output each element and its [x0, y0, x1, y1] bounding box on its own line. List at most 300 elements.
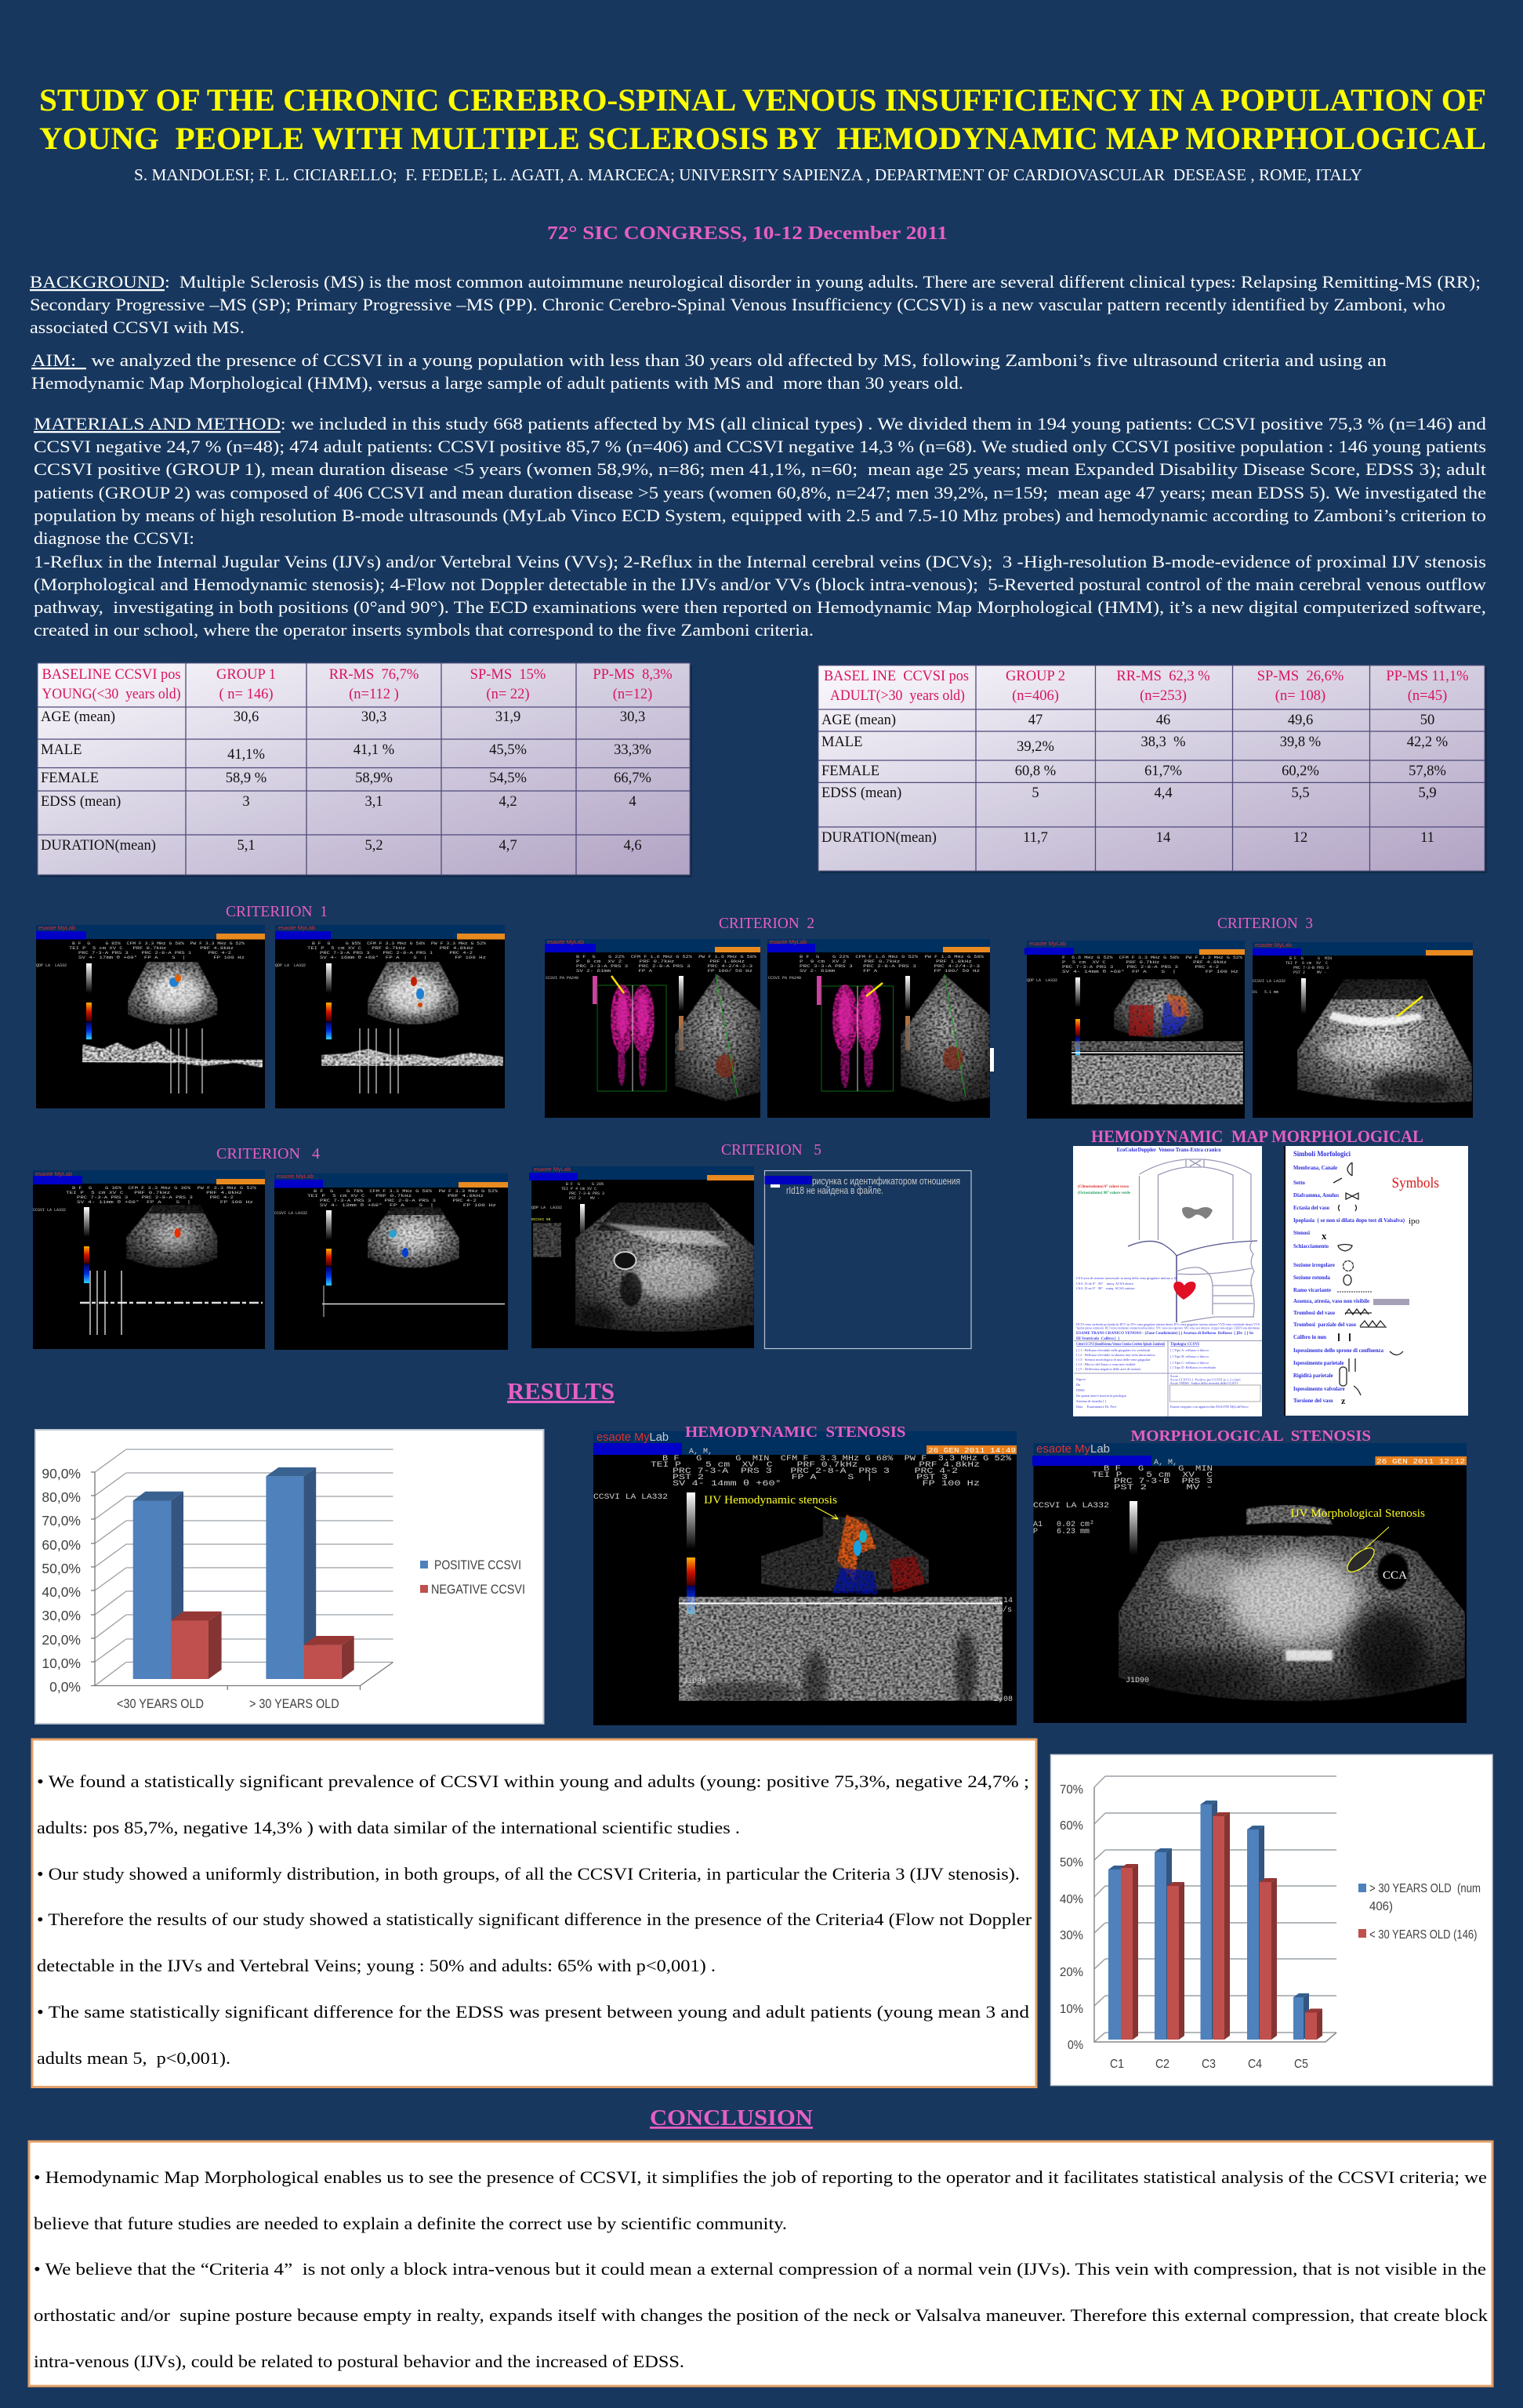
panel: hemodynamic map form: [ ] Tipo B: reflusso e blocco	[1170, 1354, 1209, 1358]
heading: criterion 5: CRITERION 5	[721, 1141, 821, 1159]
y axis labels: 20,0%	[42, 1632, 81, 1648]
panel: results findings: adults: pos 85,7%, negative 14,3% ) with data similar of the international scientific studies .	[37, 1818, 740, 1837]
y axis labels	[42, 1466, 81, 1695]
table: adult baseline: 50	[1420, 713, 1434, 728]
panel: hemodynamic map form: Da quanti anni è insorta la patologia	[1076, 1394, 1126, 1398]
table: adult baseline: 5,5	[1291, 785, 1310, 801]
ultrasound: hemodynamic stenosis: m/s	[998, 1605, 1012, 1615]
text block: materials and method: MATERIALS AND METHOD : we included in this study 668 patients affected by MS (all clinical types) . We divided them in 194 young patients: CCSVI positive 75,3 % (n=146) and	[34, 414, 1486, 433]
x axis labels: C4	[1248, 2058, 1262, 2071]
ultrasound: criterion 4 right: B F G G 78% CFM F 3.3 MHz G 58% PW F 3.3 MHz G 52%	[314, 1189, 498, 1194]
panel: results findings	[32, 1739, 1036, 2087]
ultrasound: criterion 2 right: B F G G 22% CFM F 1.6 MHz G 52% PW F 1.6 MHz G 58%	[800, 955, 984, 959]
table: young baseline: (n= 22)	[486, 687, 530, 702]
panel: morphological symbols legend: Ispessimento valvolare	[1293, 1385, 1345, 1392]
ultrasound: criterion 5: TEI P 4 cm XV C	[561, 1187, 597, 1191]
ultrasound: criterion 3 right: TEI P 6 cm XV C	[1285, 961, 1328, 966]
legend: NEGATIVE CCSVI	[431, 1582, 525, 1597]
panel: hemodynamic map form: ESAME TRANS CRANICO VENOSO - (Zone Condizioiale) [ ] Assenza di Reflusso Reflusso [ ]Dx [ ] Sn	[1076, 1332, 1253, 1336]
text block: materials and method: pathway, investigating in both positions (0°and 90°). The ECD examinations were then reported on Hemodynamic Map Morphological (HMM), it’s a new digital computerized software,	[34, 597, 1486, 617]
table: adult baseline: FEMALE	[821, 763, 879, 779]
table: young baseline: 58,9 %	[226, 771, 267, 786]
ultrasound: morphological stenosis: PRC 7-3-B PRS 3	[1114, 1478, 1213, 1486]
table: adult baseline: SP-MS 26,6%	[1257, 669, 1344, 684]
title: STUDY OF THE CHRONIC CEREBRO-SPINAL VENOUS INSUFFICIENCY IN A POPULATION OF	[39, 82, 1486, 118]
table: young baseline: ( n= 146)	[219, 687, 274, 702]
callout: IJV morphological stenosis: CCA	[1383, 1569, 1407, 1582]
table: young baseline	[38, 663, 692, 877]
panel: morphological symbols legend: Simboli Morfologici	[1293, 1151, 1351, 1159]
ultrasound: hemodynamic stenosis	[593, 1431, 1017, 1725]
bars	[1108, 1801, 1322, 2040]
panel: hemodynamic map form	[1073, 1146, 1262, 1416]
chart grid	[91, 1449, 393, 1690]
table: adult baseline: GROUP 2	[1006, 669, 1065, 684]
ultrasound: criterion 2 left: P 9 cm XV 2 PRF 0.7kHz PRF 1.8kHz	[576, 959, 745, 964]
ultrasound: criterion 2 left: SV 2- 61mm FP A FP 100/ 50 Hz	[576, 969, 752, 974]
table: young baseline: 3,1	[364, 794, 383, 810]
table: adult baseline: 12	[1293, 830, 1307, 846]
title: YOUNG PEOPLE WITH MULTIPLE SCLEROSIS BY HEMODYNAMIC MAP MORPHOLOGICAL	[39, 121, 1486, 156]
table: adult baseline: EDSS (mean)	[821, 785, 901, 801]
panel: hemodynamic map form: CSA area di sezione trasversale in mmq della vena giugulare interna a J2	[1076, 1276, 1177, 1280]
legend: > 30 YEARS OLD (num	[1369, 1882, 1481, 1895]
legend: < 30 YEARS OLD (146)	[1369, 1928, 1477, 1942]
panel: morphological symbols legend: Ipoplasia ( se non si dilata dopo test di Valsalva)	[1293, 1217, 1405, 1224]
panel: hemodynamic map form: Ypsilon plexus vertebralis BCT tronco inominato comune brachiocefalico SVC vena cava superiore SSC vena cava inferiore Azygos vena azygos LSEIN vena innominata	[1076, 1326, 1260, 1329]
text block: aim	[31, 350, 1387, 393]
text block: background: BACKGROUND : Multiple Sclerosis (MS) is the most common autoimmune neurological disorder in young adults. There are several different clinical types: Relapsing Remitting-MS (RR);	[30, 272, 1481, 292]
ultrasound: hemodynamic stenosis: CCSVI LA LA332	[593, 1493, 668, 1502]
panel: morphological symbols legend: Membrana, Canale	[1293, 1164, 1338, 1171]
callout: IJV hemodynamic stenosis: IJV Hemodynamic stenosis	[704, 1494, 837, 1507]
heading: conclusion: CONCLUSION	[650, 2106, 813, 2131]
y axis labels: 90,0%	[42, 1466, 81, 1481]
table: adult baseline: (n=253)	[1140, 688, 1187, 704]
ultrasound: morphological stenosis: A1 0.02 cm²	[1033, 1521, 1094, 1529]
table: young baseline: 5,2	[364, 838, 383, 854]
ultrasound: hemodynamic stenosis: 26 GEN 2011 14:49	[928, 1446, 1016, 1455]
table: young baseline: PP-MS 8,3%	[593, 667, 673, 683]
ultrasound: hemodynamic stenosis: -2,08	[989, 1695, 1013, 1704]
panel: morphological symbols legend: Diaframma, Anulus	[1293, 1191, 1339, 1199]
heading: criterion 2: CRITERION 2	[719, 915, 814, 932]
x axis labels: C5	[1294, 2058, 1308, 2071]
table: young baseline: 45,5%	[489, 742, 527, 758]
panel: hemodynamic map form: [ ] Tipo A: reflusso e blocco	[1170, 1348, 1209, 1352]
heading: criterion 4: CRITERION 4	[216, 1145, 320, 1162]
panel: morphological symbols legend: Ectasia del vaso	[1293, 1204, 1329, 1211]
panel: hemodynamic map form: [ ] 1 - Reflusso elevabile nelle giugulari e/o vertebrali	[1076, 1348, 1151, 1352]
panel: results findings: • Our study showed a uniformly distribution, in both groups, of all the CCSVI Criteria, in particular the Criteria 3 (IJV stenosis).	[37, 1864, 1020, 1884]
y axis labels: 30%	[1060, 1929, 1083, 1942]
table: young baseline: 66,7%	[614, 771, 651, 786]
ultrasound: criterion 3 left	[1024, 940, 1245, 1119]
callout: IJV hemodynamic stenosis	[704, 1494, 838, 1519]
panel: conclusion: • We believe that the “Criteria 4” is not only a block intra-venous but it could mean a external compression of a normal vein (IJVs). This vein with compression, that is not visible in the	[34, 2259, 1486, 2279]
ultrasound: criterion 2 left	[545, 938, 760, 1118]
panel: morphological symbols legend: Stenosi	[1293, 1229, 1310, 1236]
panel: conclusion: intra-venous (IJVs), could be related to postural behavior and the increased of EDSS.	[34, 2352, 684, 2371]
ultrasound: criterion 4 left: esaote MyLab	[35, 1170, 72, 1177]
ultrasound: criterion 4 left: B F G G 36% CFM F 3.3 MHz G 36% PW F 3.3 MHz G 52%	[72, 1186, 256, 1191]
ultrasound: criterion 4 right: TEI P 5 cm XV C PRF 0.7kHz PRF 4.8kHz	[307, 1194, 484, 1199]
table: adult baseline: 39,8 %	[1280, 734, 1321, 750]
table: young baseline: 33,3%	[614, 742, 651, 758]
x axis labels: <30 YEARS OLD	[117, 1696, 204, 1711]
panel: morphological symbols legend: z	[1341, 1395, 1346, 1406]
panel: results findings: • Therefore the results of our study showed a statistically significant difference in the presence of the Criteria4 (Flow not Doppler	[37, 1909, 1032, 1929]
chart grid	[1094, 1776, 1336, 2042]
ultrasound: criterion 1 left: esaote MyLab	[38, 924, 75, 931]
legend: 406)	[1369, 1900, 1393, 1913]
ultrasound: criterion 4 right: PRC 7-3-A PRS 3 PRC 2-8-A PRS 3 PRC 4-2	[320, 1199, 477, 1203]
y axis labels: 50%	[1060, 1856, 1083, 1869]
table: young baseline: (n=12)	[613, 687, 652, 702]
table: young baseline: 5,1	[237, 838, 256, 854]
ultrasound: criterion 2 right	[767, 938, 990, 1118]
table: adult baseline: PP-MS 11,1%	[1386, 669, 1469, 684]
vein diagram	[1128, 1159, 1257, 1322]
panel: morphological symbols legend: Ispessimento parietale	[1293, 1359, 1344, 1366]
panel: morphological symbols legend: Rigidità parietale	[1293, 1372, 1333, 1379]
ultrasound: hemodynamic stenosis: B F G G MIN CFM F 3.3 MHz G 68% PW F 3.3 MHz G 52%	[662, 1455, 1011, 1463]
placeholder: missing image box: rId18 не найдена в файле.	[786, 1185, 883, 1196]
table: adult baseline	[818, 665, 1487, 873]
table: young baseline: 4,2	[499, 794, 517, 810]
table: young baseline: 4	[629, 794, 636, 810]
table: adult baseline: 38,3 %	[1140, 734, 1186, 750]
table: adult baseline: DURATION(mean)	[821, 830, 937, 846]
y axis labels: 30,0%	[42, 1608, 81, 1623]
panel: conclusion	[29, 2141, 1492, 2386]
y axis labels: 10%	[1060, 2003, 1083, 2016]
panel: hemodynamic map form: [ ] 2 - Reflusso elevabile in almeno una vena intracranica	[1076, 1353, 1155, 1357]
panel: hemodynamic map form: (Clinostatismo) 0° colore rosso	[1078, 1185, 1130, 1189]
ultrasound: criterion 5	[529, 1166, 754, 1348]
heading: results: RESULTS	[507, 1377, 615, 1405]
ultrasound: criterion 5: QDP LA LA332	[531, 1206, 562, 1210]
ultrasound: criterion 3 right: CCSVI LA LA332	[1253, 979, 1285, 984]
panel: results findings: adults mean 5, p<0,001).	[37, 2048, 230, 2068]
text block: materials and method: CCSVI positive (GROUP 1), mean duration disease <5 years (women 58,9%, n=86; men 41,1%, n=60; mean age 25 years; mean Expanded Disability Disease Score, EDSS 3); adult	[34, 459, 1487, 479]
y axis labels: 60%	[1060, 1819, 1083, 1833]
panel: hemodynamic map form: Score VHISS Indice della severità della CCSVI	[1170, 1381, 1238, 1385]
panel: hemodynamic map form: Score CCSVI [ ] Positivo per CCSVI se ≥ 2 criteri	[1170, 1378, 1241, 1381]
panel: morphological symbols legend: Sezione irregolare	[1293, 1261, 1336, 1268]
ultrasound: hemodynamic stenosis: +0,14	[989, 1597, 1013, 1605]
panel: morphological symbols legend: Ispessimento dello sprone di confluenza	[1293, 1347, 1383, 1354]
table: young baseline: GROUP 1	[216, 667, 276, 683]
text block: materials and method: created in our school, where the operator inserts symbols that correspond to the five Zamboni criteria.	[34, 620, 814, 640]
y axis labels: 80,0%	[42, 1489, 81, 1505]
table: adult baseline: AGE (mean)	[821, 713, 896, 728]
symbols label: Symbols	[1392, 1175, 1439, 1191]
panel: morphological symbols legend: Sezione rotonda	[1293, 1274, 1330, 1281]
table: adult baseline: 57,8%	[1409, 763, 1446, 779]
table: adult baseline: 49,6	[1288, 713, 1313, 728]
panel: hemodynamic map form: Criteri CCSVI (Insufficienza Venosa Cronica Cerebro Spinale Zamboni)	[1076, 1343, 1165, 1347]
ultrasound: morphological stenosis: esaote MyLab	[1036, 1442, 1110, 1456]
panel: morphological symbols legend: ipo	[1409, 1217, 1420, 1226]
ultrasound: hemodynamic stenosis: A, M,	[689, 1448, 713, 1456]
table: adult baseline: 11,7	[1023, 830, 1048, 846]
ultrasound: criterion 5: RCCSVI 90	[531, 1217, 551, 1222]
ultrasound: criterion 2 right: CCSVI PA PA240	[768, 976, 801, 981]
title	[39, 82, 1486, 156]
ultrasound: criterion 1 right	[275, 924, 505, 1108]
ultrasound: hemodynamic stenosis: PRC 7-3-A PRS 3 PRC 2-8-A PRS 3 PRC 4-2	[673, 1467, 958, 1476]
panel: morphological symbols legend: Calibro in mm	[1293, 1333, 1327, 1340]
panel: hemodynamic map form: Dn	[1076, 1383, 1081, 1387]
table: adult baseline: 60,2%	[1282, 763, 1319, 779]
y axis labels: 40,0%	[42, 1584, 81, 1600]
panel: morphological symbols legend: Schiacciamento	[1293, 1242, 1329, 1249]
heading: hemodynamic map morphological: HEMODYNAMIC MAP MORPHOLOGICAL	[1091, 1126, 1423, 1146]
ultrasound: morphological stenosis: PST 2 MV -	[1114, 1484, 1213, 1492]
panel: hemodynamic map form: EDSS	[1076, 1388, 1085, 1392]
x axis labels: C2	[1155, 2058, 1169, 2071]
ultrasound: hemodynamic stenosis: TEI P 5 cm XV C PRF 0.7kHz PRF 4.8kHz	[651, 1460, 980, 1470]
panel: results findings: • We found a statistically significant prevalence of CCSVI within young and adults (young: positive 75,3%, negative 24,7% ;	[37, 1772, 1029, 1791]
ultrasound: criterion 4 left	[33, 1170, 265, 1349]
ultrasound: criterion 3 right: B F G G MIN	[1289, 956, 1332, 961]
ultrasound: criterion 3 right	[1253, 941, 1473, 1118]
table: adult baseline: 39,2%	[1017, 739, 1054, 755]
table: young baseline: 30,6	[234, 709, 259, 725]
table: young baseline: 58,9%	[355, 771, 393, 786]
ultrasound: criterion 2 right: PRC 3-3-A PRS 3 PRC 2-8-A PRS 3 PRC 4-2/4-2-3	[800, 964, 980, 969]
y axis labels: 50,0%	[42, 1561, 81, 1576]
table: adult baseline: 61,7%	[1144, 763, 1182, 779]
x axis labels: C1	[1110, 2058, 1124, 2071]
panel: results findings: • The same statistically significant difference for the EDSS was present between young and adult patients (young mean 3 and	[37, 2002, 1029, 2022]
ultrasound: criterion 1 left: SV 4- 17mm θ +60° FP A S | FP 100 Hz	[78, 956, 245, 960]
text block: background	[30, 272, 1481, 337]
ultrasound: morphological stenosis: 26 GEN 2011 12:12	[1376, 1457, 1465, 1466]
panel: morphological symbols legend: x	[1322, 1230, 1327, 1242]
table: adult baseline: 47	[1028, 713, 1043, 728]
panel: morphological symbols legend: Torsione del vaso	[1293, 1397, 1333, 1404]
ultrasound: criterion 1 right: SV 4- 16mm θ +60° FP A S | FP 100 Hz	[320, 956, 486, 960]
heading: criterion 3: CRITERION 3	[1217, 915, 1313, 932]
ultrasound: criterion 5: esaote MyLab	[534, 1166, 571, 1173]
y axis labels: 20%	[1060, 1966, 1083, 1979]
ultrasound: criterion 3 right: PST 2 MV -	[1293, 970, 1326, 975]
text block: materials and method: patients (GROUP 2) was composed of 406 CCSVI and mean duration disease >5 years (women 60,8%, n=247; men 39,2%, n=159; mean age 47 years; mean EDSS 5). We investigated the	[34, 483, 1486, 502]
ultrasound: morphological stenosis: A, M,	[1154, 1459, 1177, 1467]
text block: materials and method: diagnose the CCSVI:	[34, 528, 194, 548]
panel: hemodynamic map form: [ ] 5 - Differenza negativa delle aree di sezione	[1076, 1367, 1140, 1371]
ultrasound: hemodynamic stenosis: J1D90	[683, 1677, 706, 1686]
y axis labels	[1060, 1783, 1083, 2052]
table: adult baseline: 4,4	[1154, 785, 1173, 801]
ultrasound: criterion 2 right: SV 2- 61mm FP A FP 100/ 50 Hz	[800, 969, 980, 974]
ultrasound: criterion 2 left: CCSVI PA PA240	[546, 976, 578, 981]
table: young baseline: AGE (mean)	[41, 709, 115, 725]
ultrasound: criterion 3 left: P 5 cm XV C PRF 0.7kHz PRF 4.8kHz	[1062, 960, 1227, 965]
text block: materials and method: (Morphological and Hemodynamic stenosis); 4-Flow not Doppler detectable in the IJVs and/or VVs (block intra-venous); 5-Reverted postural control of the main cerebral venous outflow	[34, 575, 1487, 594]
text block: background: Secondary Progressive –MS (SP); Primary Progressive –MS (PP). Chronic Cerebro-Spinal Venous Insufficiency (CCSVI) is a new vascular pattern recently identified by Zamboni, who	[30, 295, 1445, 314]
ultrasound: criterion 3 right: esaote MyLab	[1255, 941, 1292, 948]
ultrasound: criterion 1 left	[36, 924, 265, 1108]
panel: hemodynamic map form: [ ] 3 - Stenosi morfologica di una delle vene giugulari	[1076, 1358, 1151, 1362]
table: adult baseline: 5	[1032, 785, 1039, 801]
ultrasound: morphological stenosis: CCSVI LA LA332	[1033, 1502, 1109, 1510]
y axis labels: 10,0%	[42, 1656, 81, 1671]
callout: IJV morphological stenosis	[1290, 1507, 1425, 1582]
panel: hemodynamic map form: [ ] Tipo C: reflusso e blocco	[1170, 1361, 1209, 1365]
ultrasound: criterion 4 left: PRC 7-3-A PRS 3 PRC 2-8-A PRS 3 PRC 4-2	[77, 1195, 234, 1200]
ultrasound: hemodynamic stenosis: esaote MyLab	[597, 1431, 669, 1444]
authors: S. MANDOLESI; F. L. CICIARELLO; F. FEDELE; L. AGATI, A. MARCECA; UNIVERSITY SAPIENZA , DEPARTMENT OF CARDIOVASCULAR DESEASE , ROME, ITALY	[134, 165, 1362, 184]
panel: hemodynamic map form: [ ] 4 - Blocco del flusso a vena non visibile	[1076, 1362, 1136, 1366]
table: young baseline: EDSS (mean)	[41, 794, 121, 810]
ultrasound: criterion 1 left: B F G G 85% CFM F 3.3 MHz G 58% PW F 3.3 MHz G 52%	[72, 941, 245, 946]
ultrasound: criterion 1 right: PRC 7-3-A PRS 3 PRC 2-8-A PRS 1 PRC 4-2	[320, 951, 473, 956]
bar chart: criteria by age group	[1050, 1754, 1492, 2085]
panel: hemodynamic map form: III Ventricolo Calibro [ ]	[1076, 1337, 1119, 1341]
ultrasound: criterion 1 left: PRC 7-3-A PRS 3 PRC 2-8-A PRS 1 PRC 4-2	[78, 951, 231, 956]
table: adult baseline: 14	[1156, 830, 1170, 846]
bars: over 30	[266, 1467, 354, 1679]
table: adult baseline: (n=45)	[1408, 688, 1447, 704]
heading: morphological stenosis: MORPHOLOGICAL STENOSIS	[1130, 1427, 1371, 1445]
ultrasound: hemodynamic stenosis: PST 2 FP A S | PST 3	[673, 1473, 948, 1482]
ultrasound: criterion 4 left: TEI P 5 cm XV C PRF 0.7kHz PRF 4.8kHz	[66, 1191, 242, 1195]
ultrasound: morphological stenosis: P 6.23 mm	[1033, 1528, 1090, 1536]
table: young baseline: DURATION(mean)	[41, 838, 156, 854]
ultrasound: morphological stenosis	[1032, 1442, 1467, 1723]
text block: materials and method: CCSVI negative 24,7 % (n=48); 474 adult patients: CCSVI positive 85,7 % (n=406) and CCSVI negative 14,3 % (n=68). We studied only CCSVI positive population : 146 young patients	[34, 437, 1486, 456]
panel: morphological symbols legend: Ramo vicariante	[1293, 1286, 1332, 1293]
text block: aim: AIM: we analyzed the presence of CCSVI in a young population with less than 30 years old affected by MS, following Zamboni’s five ultrasound criteria and using an	[31, 350, 1387, 370]
table: young baseline: RR-MS 76,7%	[329, 667, 419, 683]
panel: morphological symbols legend	[1284, 1146, 1468, 1416]
panel: hemodynamic map form: EcoColorDoppler Venoso Trans-Extra cranico	[1117, 1146, 1221, 1153]
bars: under 30	[133, 1492, 222, 1679]
ultrasound: criterion 3 left: esaote MyLab	[1029, 940, 1066, 947]
table: adult baseline: 11	[1420, 830, 1434, 846]
panel: hemodynamic map form: Score	[1170, 1374, 1178, 1378]
placeholder: missing image box	[765, 1171, 971, 1348]
ultrasound: criterion 4 right: SV 4- 13mm θ +60° FP A S | FP 100 Hz	[320, 1203, 496, 1208]
text block: materials and method: 1-Reflux in the Internal Jugular Veins (IJVs) and/or Vertebral Veins (VVs); 2-Reflux in the Internal cerebral veins (DCVs); 3 -High-resolution B-mode-evidence of proximal IJV stenosis	[34, 552, 1486, 571]
ultrasound: criterion 4 right: esaote MyLab	[277, 1173, 314, 1180]
text block: materials and method	[34, 414, 1487, 640]
panel: morphological symbols legend: Trombosi del vaso	[1293, 1309, 1335, 1316]
ultrasound: morphological stenosis: J1D90	[1126, 1677, 1149, 1685]
x axis labels	[117, 1696, 339, 1711]
symbol glyph marks	[1333, 1162, 1403, 1395]
panel: hemodynamic map form: [ ] Tipo D: Reflusso in vertebrale	[1170, 1365, 1216, 1369]
ultrasound: criterion 3 left: F 6.6 MHz G 52% CFM F 3.3 MHz G 58% PW F 3.3 MHz G 52%	[1062, 956, 1242, 960]
panel: hemodynamic map form: CSA J2 dx 0° 90° mmq ACSA destra	[1076, 1282, 1133, 1286]
table: adult baseline: ADULT(>30 years old)	[830, 688, 965, 704]
text block: materials and method: population by means of high resolution B-mode ultrasounds (MyLab Vinco ECD System, equipped with 2.5 and 7.5-10 Mhz probes) and hemodynamic according to Zamboni’s criterion to	[34, 506, 1486, 525]
ultrasound: criterion 2 left: B F G G 22% CFM F 1.6 MHz G 52% PW F 1.6 MHz G 58%	[576, 955, 756, 959]
ultrasound: criterion 2 left: esaote MyLab	[547, 938, 584, 945]
ultrasound: criterion 1 right: B F G G 85% CFM F 3.3 MHz G 58% PW F 3.3 MHz G 52%	[312, 941, 486, 946]
table: young baseline: 4,6	[623, 838, 642, 854]
panel: hemodynamic map form: CSA J2 sn 0° 90° mmq ACSA sinistra	[1076, 1286, 1135, 1290]
ultrasound: criterion 1 right: TEI P 5 cm XV C PRF 0.7kHz PRF 4.8kHz	[307, 946, 473, 951]
table: young baseline: 3	[242, 794, 250, 810]
table: adult baseline: (n=406)	[1012, 688, 1059, 704]
y axis labels: 0,0%	[49, 1679, 81, 1695]
table: adult baseline: 42,2 %	[1407, 734, 1448, 750]
ultrasound: criterion 3 right: D1 5.1 mm	[1253, 990, 1278, 995]
panel: hemodynamic map form: Data Esaminatore Dr. Prof	[1076, 1405, 1117, 1409]
panel: results findings: detectable in the IJVs and Vertebral Veins; young : 50% and adults: 65% with p<0,001) .	[37, 1956, 716, 1975]
ultrasound: criterion 2 left: PRC 3-3-A PRS 3 PRC 2-8-A PRS 3 PRC 4-2/4-2-3	[576, 964, 752, 969]
table: young baseline: 31,9	[495, 709, 520, 725]
heading: hemodynamic stenosis: HEMODYNAMIC STENOSIS	[685, 1423, 906, 1441]
ultrasound: criterion 2 right: P 9 cm XV 2 PRF 0.7kHz PRF 1.8kHz	[800, 959, 972, 964]
ultrasound: morphological stenosis: B F G G MIN	[1104, 1465, 1213, 1474]
placeholder: missing image box: рисунка с идентификатором отношения	[812, 1176, 960, 1187]
legend: POSITIVE CCSVI	[434, 1558, 521, 1572]
ultrasound: morphological stenosis: TEI P 5 cm XV C	[1092, 1471, 1213, 1480]
ultrasound: criterion 3 left: QDP LA LA332	[1027, 978, 1057, 983]
ultrasound: criterion 2 right: esaote MyLab	[770, 938, 807, 945]
ultrasound: criterion 4 left: SV 4- 11mm θ +60° FP A S | FP 100 Hz	[77, 1200, 253, 1205]
ultrasound: hemodynamic stenosis: SV 4- 14mm θ +60° FP 100 Hz	[673, 1479, 980, 1489]
ultrasound: criterion 4 right	[274, 1173, 508, 1350]
heading: criterion 1: CRITERIION 1	[226, 903, 328, 920]
y axis labels: 70%	[1060, 1783, 1083, 1797]
ultrasound: criterion 3 left: SV 4- 14mm θ +60° FP A S | FP 100 Hz	[1062, 970, 1238, 974]
table: young baseline: 30,3	[361, 709, 386, 725]
table: adult baseline: 60,8 %	[1015, 763, 1056, 779]
callout: IJV morphological stenosis: IJV Morphological Stenosis	[1290, 1507, 1425, 1520]
panel: hemodynamic map form: Sigr.ra	[1076, 1377, 1086, 1381]
bar chart: CCSVI prevalence	[35, 1430, 544, 1724]
ultrasound: criterion 4 right: CCSVI LA LA332	[274, 1211, 307, 1216]
panel: hemodynamic map form: Tipologia CCSVI	[1170, 1343, 1199, 1347]
table: young baseline: SP-MS 15%	[470, 667, 546, 683]
table: adult baseline: 46	[1156, 713, 1170, 728]
y axis labels: 60,0%	[42, 1537, 81, 1553]
x axis labels: C3	[1202, 2058, 1216, 2071]
ultrasound: criterion 1 left: TEI P 5 cm XV C PRF 0.7kHz PRF 4.8kHz	[69, 946, 234, 951]
ultrasound: criterion 5: PRC 7-3-B PRS 3	[569, 1191, 604, 1196]
panel: conclusion: orthostatic and/or supine posture because empty in realty, expands itself with changes the position of the neck or Valsalva maneuver. Therefore this external compression, that create block	[34, 2305, 1489, 2325]
table: young baseline: 41,1 %	[354, 742, 394, 758]
panel: hemodynamic map form: Esame eseguito con apparecchio ESAOTE MyLabVinco	[1170, 1405, 1249, 1409]
ultrasound: criterion 4 left: CCSVI LA LA332	[33, 1208, 66, 1213]
legend	[420, 1558, 525, 1597]
text block: background: associated CCSVI with MS.	[30, 317, 245, 337]
panel: conclusion: believe that future studies are needed to explain a definite the correct use by scientific community.	[34, 2214, 787, 2233]
legend	[1358, 1882, 1481, 1942]
panel: hemodynamic map form: DCVS vena cerebrale profonda dx DCV sn JJVs vena giugulare interna destra JJVs vena giugulare interna sinistra VVD vena vertebrale destra VVS	[1076, 1322, 1260, 1326]
table: young baseline: YOUNG(<30 years old)	[42, 687, 180, 702]
ultrasound: criterion 5: PST 2 MV -	[569, 1196, 600, 1201]
ultrasound: criterion 3 left: PRC 7-3-A PRS 3 PRC 2-8-A PRS 3 PRC 4-2	[1062, 965, 1219, 970]
ultrasound: criterion 1 right: QDP LA LA332	[275, 963, 306, 968]
table: young baseline: 41,1%	[227, 747, 265, 763]
artifact: small white bar	[990, 1048, 994, 1072]
panel: hemodynamic map form: Sistema di rimedio [ ]	[1076, 1399, 1107, 1403]
panel: hemodynamic map form: (Ortostatismo) 90° colore verde	[1078, 1191, 1131, 1195]
table: adult baseline: MALE	[821, 734, 862, 750]
table: adult baseline: 5,9	[1418, 785, 1437, 801]
table: young baseline: FEMALE	[41, 771, 99, 786]
icon: brain ventricle	[1182, 1207, 1213, 1219]
panel: conclusion: • Hemodynamic Map Morphological enables us to see the presence of CCSVI, it simplifies the job of reporting to the operator and it facilitates statistical analysis of the CCSVI criteria; we	[34, 2167, 1487, 2187]
table: young baseline: 4,7	[499, 838, 517, 854]
